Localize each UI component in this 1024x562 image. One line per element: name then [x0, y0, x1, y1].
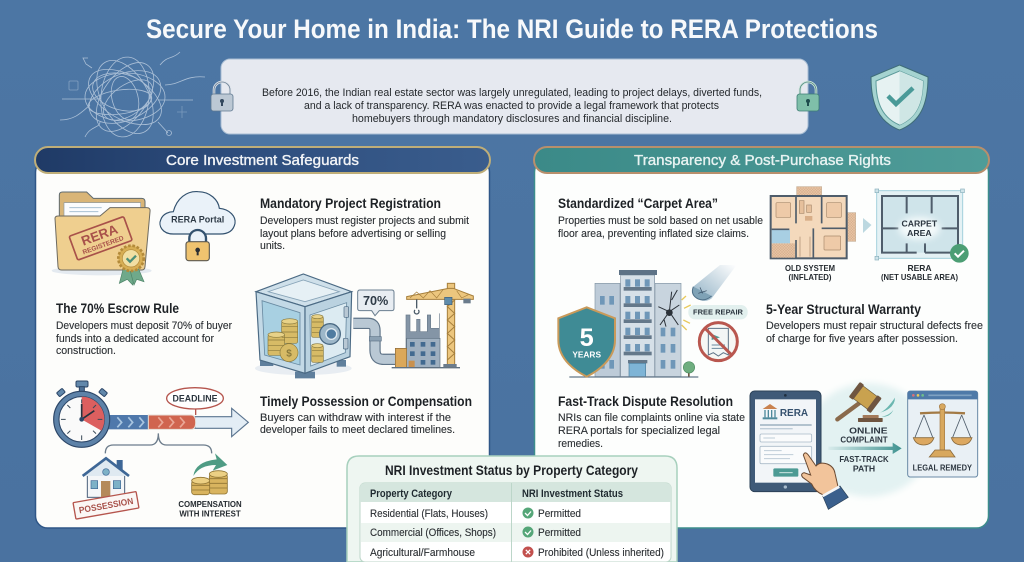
text: timely possession or compensation	[260, 394, 472, 436]
panel: intro text	[221, 59, 808, 134]
text: 5-year structural warranty: of charge for five years after possession.	[766, 333, 958, 345]
icon: old system floor plan	[771, 187, 856, 258]
table: property category status: Property Category	[370, 488, 452, 500]
icon: compensation coins with arrow: COMPENSATION	[178, 499, 242, 509]
text: mandatory project registration	[260, 196, 469, 252]
icon: compensation coins with arrow	[178, 453, 242, 518]
icon: tablet complaint form: RERA	[780, 408, 808, 419]
text: fast-track dispute resolution: NRIs can file complaints online via state	[558, 412, 745, 424]
icon: pointing hand	[802, 453, 848, 509]
panel: intro text: Before 2016, the Indian real estate sector was largely unregulated, leading to project delays, diverted funds,	[262, 87, 762, 99]
heading: core investment safeguards	[35, 147, 490, 173]
table: property category status: Permitted	[538, 508, 581, 520]
label: old system inflated: (INFLATED)	[788, 272, 832, 282]
icon: escrow safe, pipe and construction site: $	[286, 348, 292, 359]
text: 70 percent escrow rule: funds into a dedicated account for	[56, 333, 214, 345]
title: Secure Your Home in India: The NRI Guide to RERA Protections	[146, 14, 878, 44]
icon: online complaint to legal remedy flow	[750, 382, 978, 509]
text: standardized carpet area: Properties must be sold based on net usable	[558, 215, 763, 227]
icon: building with 5 years shield	[558, 265, 748, 377]
label: old system inflated: OLD SYSTEM	[785, 263, 835, 273]
panel: NRI investment status table	[347, 456, 677, 562]
text: fast-track dispute resolution	[558, 394, 745, 450]
text: 5-year structural warranty	[766, 302, 983, 345]
label: RERA net usable area: (NET USABLE AREA)	[881, 272, 958, 282]
panel: intro text: and a lack of transparency. RERA was enacted to provide a legal framework that protects	[304, 100, 719, 112]
icon: RERA carpet area plan	[875, 189, 969, 263]
text: mandatory project registration: Mandatory Project Registration	[260, 196, 441, 211]
icon: online complaint to legal remedy flow: PATH	[853, 463, 875, 473]
table title: NRI Investment Status by Property Category	[385, 463, 638, 478]
icon: RERA portal cloud and lock: RERA Portal	[171, 214, 224, 224]
text: mandatory project registration: layout plans before advertising or selling	[260, 228, 446, 240]
text: 70 percent escrow rule: The 70% Escrow Rule	[56, 301, 179, 316]
table: property category status: Permitted	[538, 527, 581, 539]
icon: RERA registered folder: RERA	[79, 221, 120, 249]
icon: compensation coins with arrow: WITH INTEREST	[179, 508, 241, 518]
icon: gavel	[837, 382, 895, 422]
icon: building with 5 years shield: FREE REPAIR	[693, 307, 744, 316]
text: standardized carpet area: Standardized “Carpet Area”	[558, 196, 718, 211]
text: timely possession or compensation: Timely Possession or Compensation	[260, 394, 472, 409]
icon: stopwatch and deadline timeline	[54, 381, 248, 453]
table: property category status: NRI Investment Status	[522, 488, 623, 500]
icon: legal remedy scales window: LEGAL REMEDY	[913, 462, 972, 472]
panel: transparency and post-purchase rights	[534, 147, 989, 528]
icon: tablet complaint form	[750, 391, 821, 492]
text: timely possession or compensation: developer fails to meet declared timelines.	[260, 424, 455, 436]
icon: shield with check	[871, 65, 928, 130]
table: property category status	[360, 483, 671, 562]
icon: green padlock	[797, 82, 819, 111]
label: RERA net usable area: RERA	[907, 263, 932, 273]
text: 70 percent escrow rule: Developers must deposit 70% of buyer	[56, 320, 232, 332]
icon: RERA carpet area plan: AREA	[907, 228, 932, 238]
icon: grey padlock	[211, 82, 233, 111]
panel: intro text: homebuyers through mandatory disclosures and financial discipline.	[352, 113, 672, 125]
table: property category status: Agricultural/Farmhouse	[370, 547, 475, 559]
text: 5-year structural warranty: 5-Year Structural Warranty	[766, 302, 921, 317]
label: RERA net usable area	[881, 263, 958, 282]
table: property category status: Residential (Flats, Houses)	[370, 508, 488, 520]
icon: online complaint to legal remedy flow: COMPLAINT	[840, 435, 888, 445]
icon: house with possession stamp: POSSESSION	[78, 496, 134, 515]
table: property category status: Commercial (Offices, Shops)	[370, 527, 496, 539]
heading: transparency and post-purchase rights	[534, 147, 989, 173]
text: fast-track dispute resolution: RERA portals for specialized legal	[558, 425, 720, 437]
arrow: old system to RERA	[863, 218, 872, 233]
icon: stopwatch and deadline timeline: DEADLINE	[172, 394, 217, 404]
text: fast-track dispute resolution: Fast-Track Dispute Resolution	[558, 394, 733, 409]
table: property category status: Prohibited (Unless inherited)	[538, 547, 664, 559]
icon: escrow safe, pipe and construction site	[255, 274, 473, 378]
icon: RERA portal cloud and lock	[160, 192, 235, 261]
icon: house with possession stamp	[73, 458, 139, 519]
text: 70 percent escrow rule: construction.	[56, 345, 116, 357]
icon: RERA registered folder: REGISTERED	[82, 235, 125, 256]
icon: escrow safe, pipe and construction site: 70%	[363, 294, 388, 308]
text: 70 percent escrow rule	[56, 301, 232, 357]
text: 5-year structural warranty: Developers must repair structural defects free	[766, 320, 983, 332]
text: mandatory project registration: Developers must register projects and submit	[260, 215, 469, 227]
icon: tangled scribble	[60, 51, 205, 143]
icon: RERA registered folder	[52, 192, 152, 285]
heading: core investment safeguards: Core Investment Safeguards	[166, 153, 359, 169]
panel: core investment safeguards	[35, 147, 490, 528]
text: timely possession or compensation: Buyers can withdraw with interest if the	[260, 412, 451, 424]
icon: online complaint to legal remedy flow: ONLINE	[849, 425, 888, 435]
text: standardized carpet area	[558, 196, 763, 240]
label: old system inflated	[785, 263, 835, 282]
heading: transparency and post-purchase rights: Transparency & Post-Purchase Rights	[634, 153, 891, 169]
icon: legal remedy scales window	[908, 391, 978, 477]
icon: building with 5 years shield: 5	[580, 324, 594, 352]
text: mandatory project registration: units.	[260, 240, 285, 252]
icon: online complaint to legal remedy flow: FAST-TRACK	[839, 454, 889, 464]
text: fast-track dispute resolution: remedies.	[558, 438, 603, 450]
icon: building with 5 years shield: YEARS	[572, 349, 601, 359]
icon: RERA carpet area plan: CARPET	[902, 218, 938, 228]
text: standardized carpet area: floor area, preventing inflated size claims.	[558, 228, 749, 240]
